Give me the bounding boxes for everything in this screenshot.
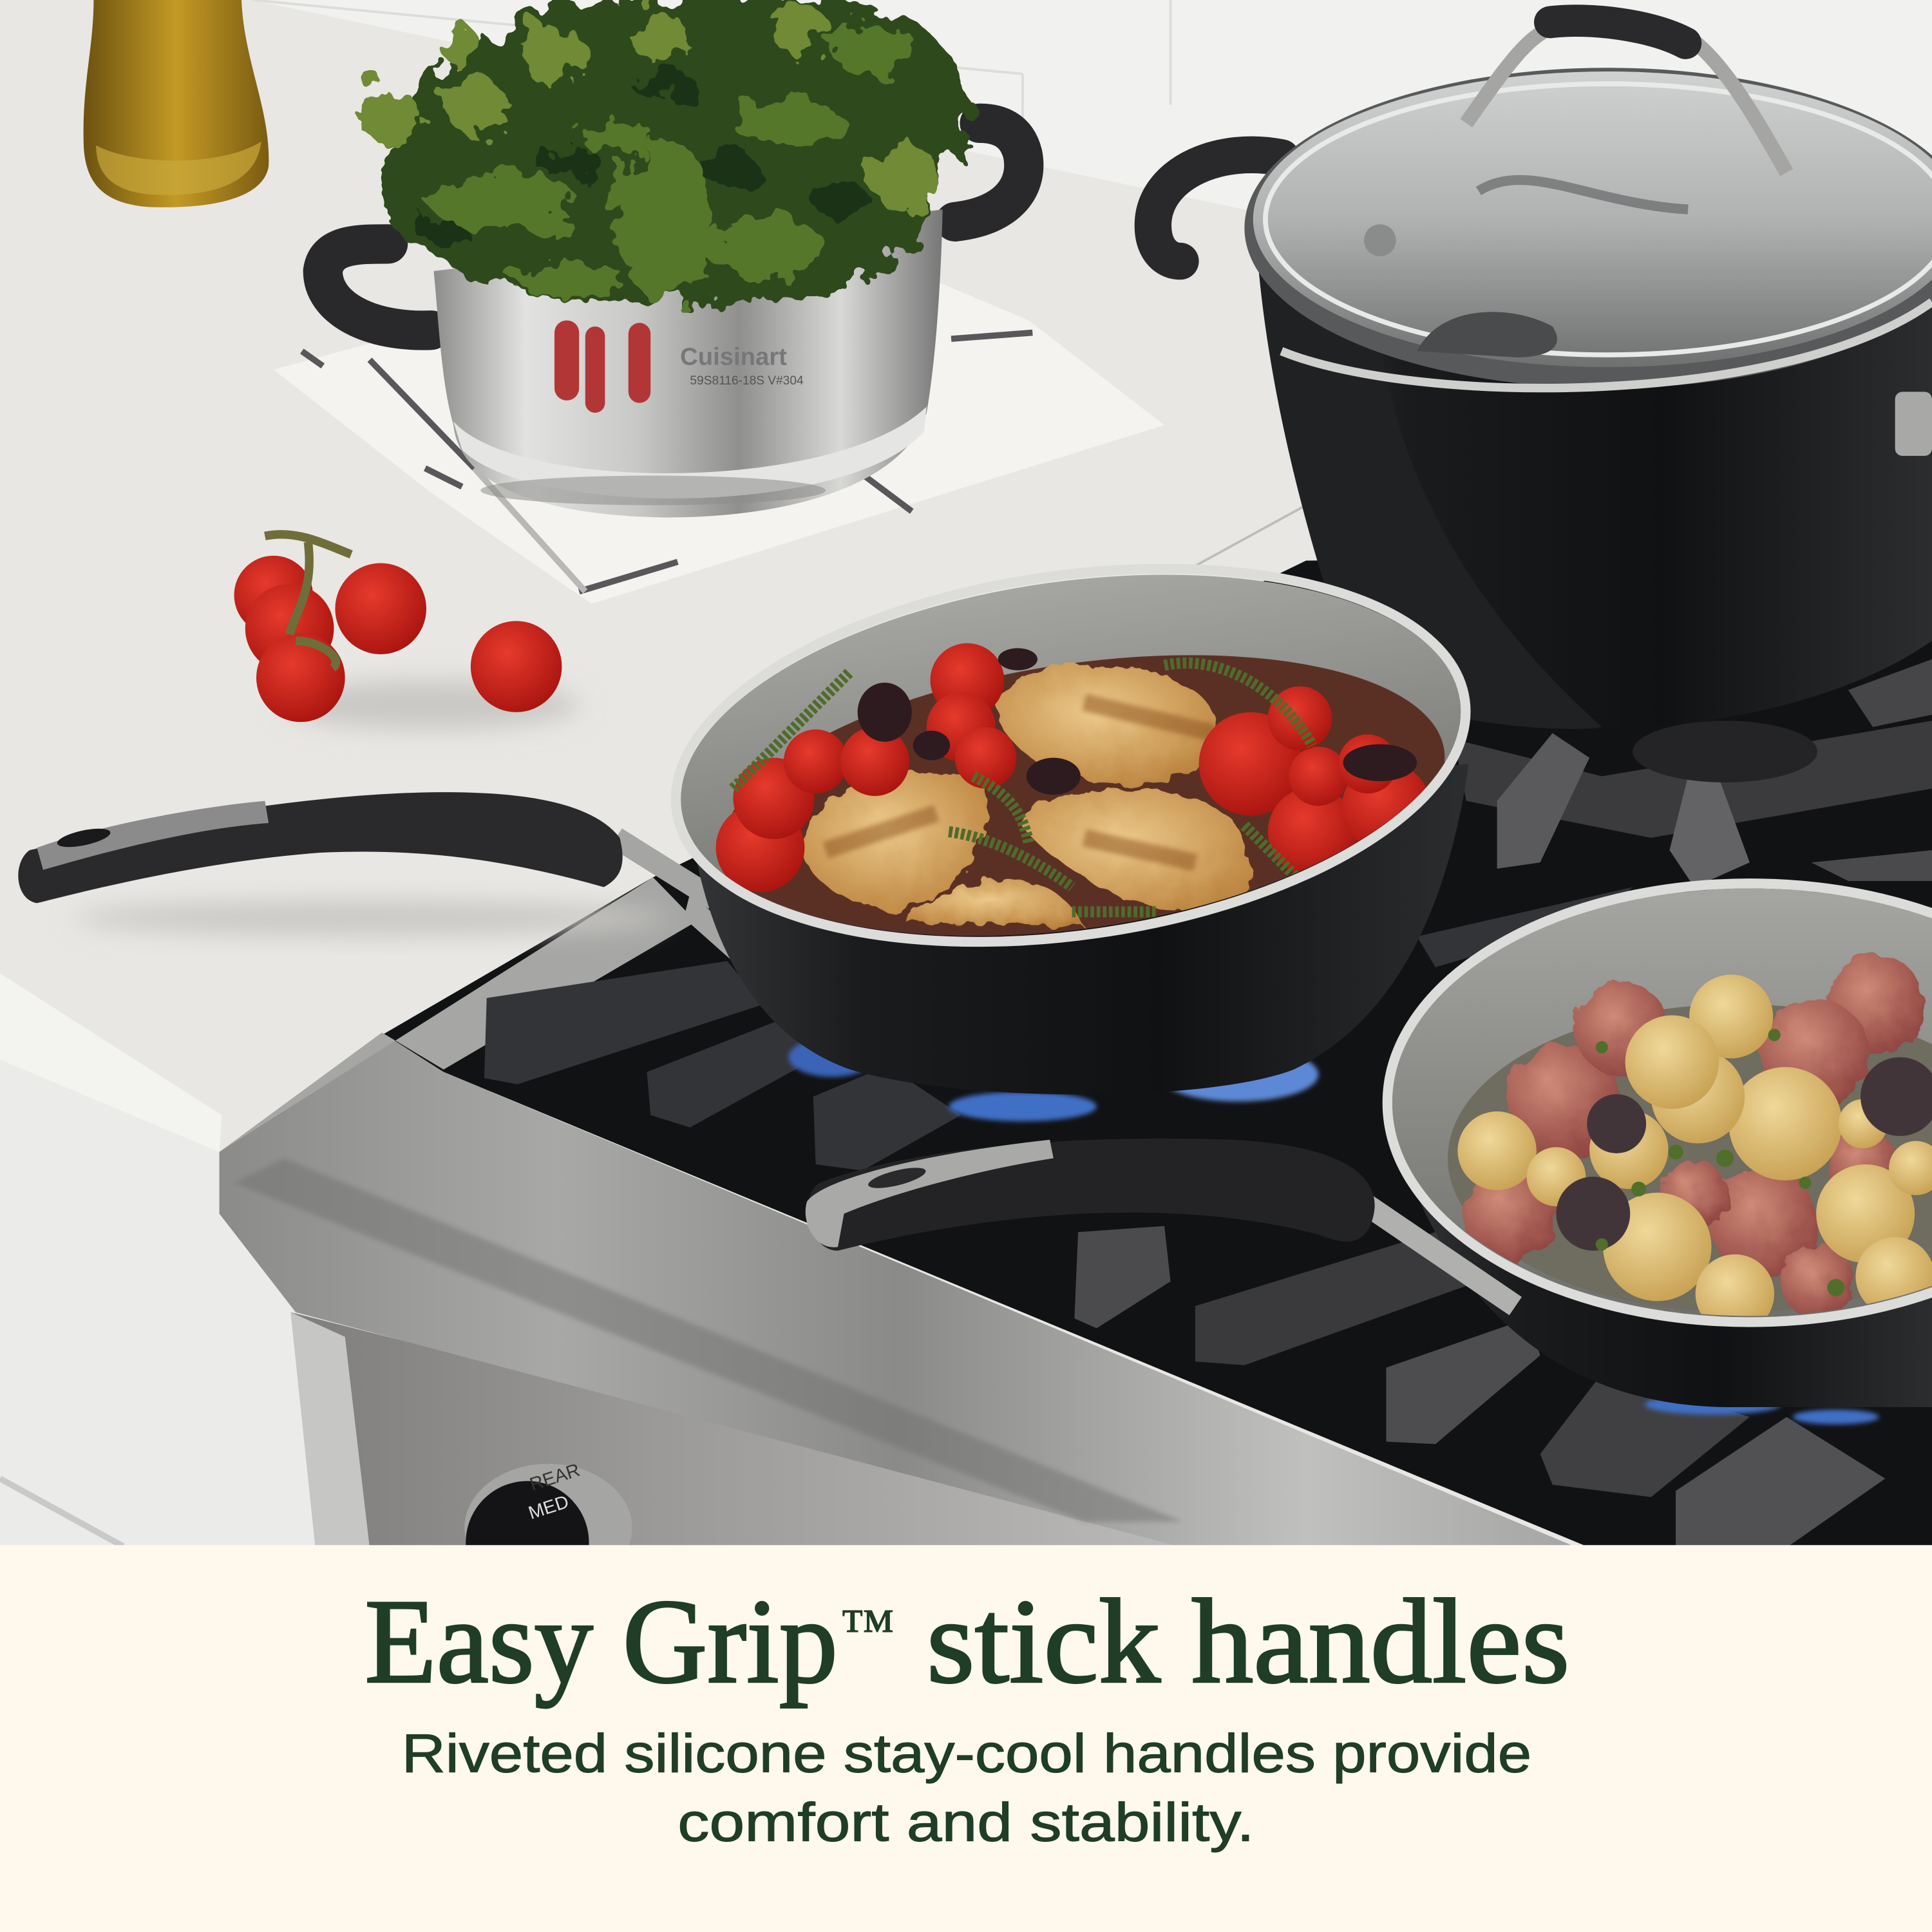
- chicken pieces: [803, 664, 1251, 927]
- subheading text: comfort and stability.: [677, 1792, 1255, 1852]
- back pan with potatoes: [1387, 884, 1932, 1407]
- steamer pot: [323, 123, 1024, 518]
- steamer handles: [323, 244, 431, 330]
- kitchen towel: [274, 271, 1164, 604]
- stove cooktop and stainless band: [220, 554, 1932, 1548]
- heading: Easy Grip: [365, 1575, 838, 1709]
- control knob: [464, 1460, 632, 1604]
- tomatoes in pan: [716, 643, 1430, 892]
- loose cherry tomatoes: [234, 535, 579, 730]
- back pan rim: [1387, 884, 1932, 1322]
- heading: ™: [840, 1598, 895, 1658]
- caption band: [0, 1545, 1932, 1932]
- subheading text: Riveted silicone stay-cool handles provide: [402, 1723, 1531, 1783]
- olives: [858, 648, 1417, 795]
- front pan rim: [652, 522, 1490, 989]
- oil bottle: [84, 0, 269, 207]
- broccoli rabe greens: [359, 0, 970, 305]
- burner flames: [788, 1037, 1879, 1425]
- control knob: REAR: [527, 1460, 582, 1495]
- rosemary: [733, 663, 1312, 912]
- steamer pot: Cuisinart: [680, 343, 787, 370]
- control knob: MED: [526, 1492, 571, 1524]
- front pan long handle: [18, 792, 754, 967]
- back wall tiles: [252, 0, 1932, 569]
- large black pot with glass lid: [1153, 21, 1932, 729]
- steamer pot: 59S8116-18S V#304: [690, 374, 804, 388]
- white cabinet: [0, 973, 316, 1548]
- subheading text: [402, 1723, 1531, 1852]
- front pan with chicken and tomatoes: [671, 564, 1471, 1095]
- stove front panel: [291, 1312, 1220, 1548]
- heading: [365, 1575, 1569, 1709]
- back pan long handle: [806, 1139, 1515, 1306]
- heading: stick handles: [927, 1575, 1569, 1709]
- stove grates: [484, 659, 1932, 1548]
